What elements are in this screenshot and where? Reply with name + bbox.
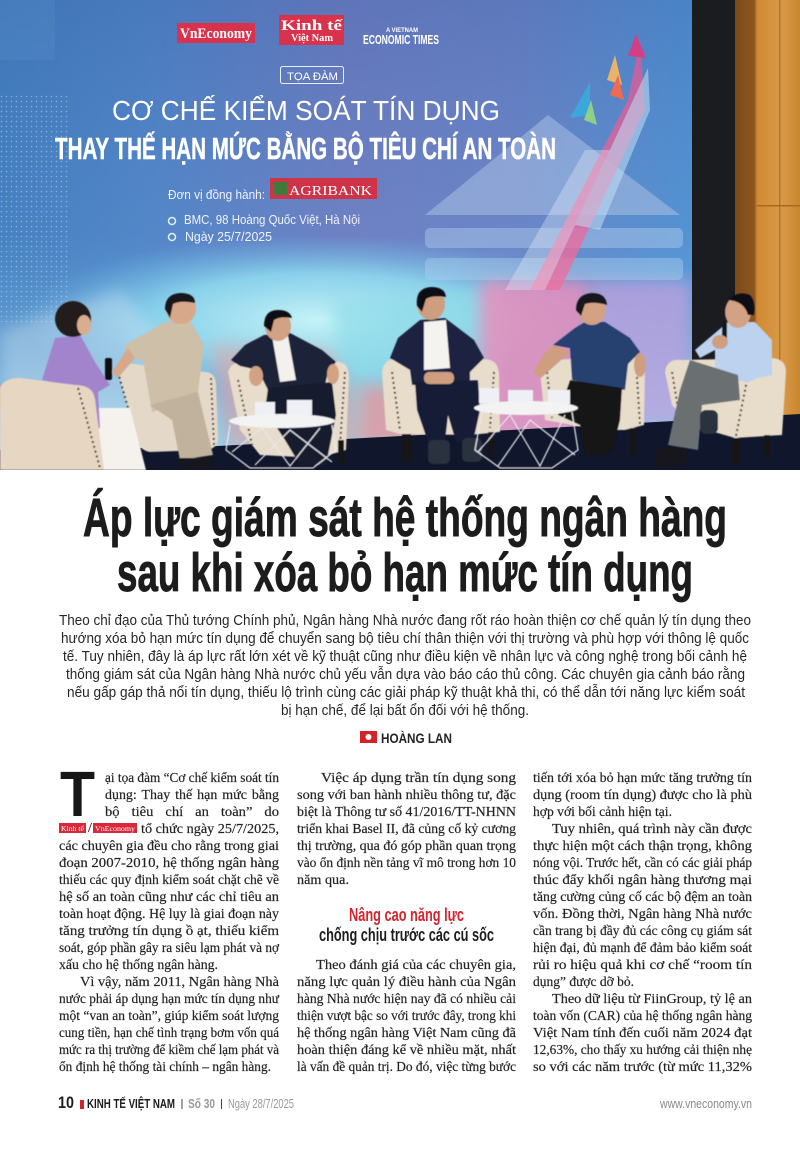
screen title: CƠ CHẾ KIỂM SOÁT TÍN DỤNG bbox=[112, 95, 500, 126]
body column 3: tiến tới xóa bỏ hạn mức tăng trưởng tín bbox=[533, 771, 752, 786]
footer: Ngày 28/7/2025 bbox=[228, 1097, 294, 1111]
body column 2, lower text: hệ thống ngân hàng Việt Nam cũng đã bbox=[297, 1026, 517, 1041]
panelist 5 in blue shirt with chair bbox=[533, 293, 646, 456]
body column 2, upper text: vào ổn định nền tảng vĩ mô trong hơn 10 bbox=[297, 856, 516, 871]
logo: Kinh tế Việt Nam: Việt Nam bbox=[291, 33, 334, 44]
body column 1: bộ tiêu chí an toàn” do bbox=[105, 805, 279, 820]
footer: 10 bbox=[58, 1093, 74, 1112]
logo: Vietnam Economic Times bbox=[364, 28, 439, 44]
intro paragraph: hướng xóa bỏ hạn mức tín dụng để chuyển sang bộ tiêu chí thân thiện với thị trường và phù hợp với thông lệ quốc bbox=[61, 631, 749, 647]
body column 3: dụng” được dỡ bỏ. bbox=[533, 975, 634, 990]
body column 1: soát, góp phần gây ra siêu lạm phát và nợ bbox=[59, 941, 280, 956]
byline bbox=[360, 730, 452, 746]
body column 1: thiếu các quy định kiểm soát chặt chẽ về bbox=[59, 873, 279, 888]
drop cap: T bbox=[60, 758, 95, 830]
screen label: TỌA ĐÀM: TỌA ĐÀM bbox=[287, 70, 338, 83]
panelists and furniture bbox=[0, 287, 786, 470]
footer: Số 30 bbox=[188, 1097, 215, 1111]
intro paragraph: bị hạn chế, để lại bất ổn đối với hệ thống. bbox=[281, 703, 529, 719]
intro paragraph bbox=[59, 613, 751, 719]
body column 1 bbox=[59, 758, 280, 1075]
screen sponsor: Agribank: Đơn vị đồng hành: bbox=[168, 188, 265, 202]
screen venue and date: Ngày 25/7/2025 bbox=[185, 230, 272, 244]
logo: Vietnam Economic Times: A VIETNAM bbox=[386, 28, 418, 34]
body column 3: thực hiện một cách thận trọng, không bbox=[533, 839, 752, 854]
footer: KINH TẾ VIỆT NAM bbox=[87, 1096, 175, 1111]
screen sponsor: Agribank bbox=[168, 178, 377, 202]
logo: VnEconomy: VnEconomy bbox=[180, 26, 252, 42]
intro paragraph: nếu gấp gáp thả nổi tín dụng, thiếu lộ trình cùng các giải pháp kỹ thuật khả thi, có thể dẫn tới năng lực kiểm soát bbox=[67, 684, 745, 701]
body column 3: cần trang bị đầy đủ các công cụ giám sát bbox=[533, 924, 752, 939]
body column 2, upper text bbox=[297, 771, 516, 888]
body column 3: Theo dữ liệu từ FiinGroup, tỷ lệ an bbox=[552, 992, 752, 1007]
wall: dark panel and wood bbox=[692, 0, 800, 415]
inline logos: Kinh tế / VnEconomy: Kinh tế bbox=[61, 825, 85, 833]
body column 3 bbox=[533, 771, 752, 1075]
body column 3: thúc đẩy khối ngân hàng thương mại bbox=[533, 873, 752, 888]
intro paragraph: tế. Tuy nhiên, đây là áp lực rất lớn xét về kỹ thuật cũng như điều kiện về nhân lực và công nghệ trong bối cảnh hệ bbox=[63, 649, 747, 665]
body column 1: ổn định hệ thống tài chính – ngân hàng. bbox=[59, 1060, 271, 1075]
body column 3: toàn vốn (CAR) của hệ thống ngân hàng bbox=[533, 1009, 752, 1024]
body column 1: tăng trưởng tín dụng ồ ạt, thiếu kiểm bbox=[59, 924, 279, 939]
body column 1: hệ số an toàn cũng như các chỉ tiêu an bbox=[59, 890, 279, 905]
body column 2, lower text bbox=[297, 958, 517, 1075]
subheading: chống chịu trước các cú sốc bbox=[319, 925, 494, 945]
subheading bbox=[319, 905, 494, 945]
logo: Kinh tế Việt Nam: Kinh tế bbox=[281, 18, 344, 34]
subheading: Nâng cao năng lực bbox=[349, 905, 464, 925]
body column 2, upper text: biệt là Thông tư số 41/2016/TT-NHNN bbox=[297, 805, 516, 820]
body column 2, upper text: song với ban hành nhiều thông tư, đặc bbox=[297, 788, 516, 803]
screen sponsor: Agribank: AGRIBANK bbox=[289, 184, 372, 199]
body column 1: các chuyên gia đều cho rằng trong giai bbox=[59, 839, 279, 854]
intro paragraph: thống giám sát của Ngân hàng Nhà nước chủ yếu vẫn dựa vào báo cáo thủ công. Các chuyên gia cảnh báo rằng bbox=[66, 666, 745, 683]
body column 3: hiện đại, đủ mạnh để đảm bảo kiểm soát bbox=[533, 941, 752, 956]
body column 3: Tuy nhiên, quá trình này cần được bbox=[552, 822, 752, 837]
footer bbox=[58, 1093, 752, 1112]
table 1 with name cards bbox=[226, 400, 336, 468]
body column 1: toàn hoạt động. Hệ lụy là giai đoạn này bbox=[59, 907, 279, 922]
screen title: THAY THẾ HẠN MỨC BẰNG BỘ TIÊU CHÍ AN TOÀN bbox=[55, 130, 556, 166]
logo: Vietnam Economic Times: ECONOMIC TIMES bbox=[363, 32, 439, 47]
body column 2, upper text: triển khai Basel II, đã củng cố kỷ cương bbox=[297, 822, 516, 837]
body column 3: hợp với bối cảnh hiện tại. bbox=[533, 805, 672, 820]
footer: www.vneconomy.vn bbox=[659, 1097, 752, 1111]
body column 1: xấu cho hệ thống ngân hàng. bbox=[59, 958, 218, 973]
body column 1: Vì vậy, năm 2011, Ngân hàng Nhà bbox=[80, 975, 280, 990]
body column 3: dụng (room tín dụng) được cho là phù bbox=[533, 788, 752, 803]
body column 2, upper text: Việc áp dụng trần tín dụng song bbox=[321, 771, 516, 786]
body column 1: ại tọa đàm “Cơ chế kiểm soát tín bbox=[105, 771, 279, 786]
body column 3: vốn. Đồng thời, Ngân hàng Nhà nước bbox=[533, 907, 752, 922]
body column 2, lower text: hoàn thiện đáng kể về nhiều mặt, nhất bbox=[297, 1043, 516, 1058]
photo: panel discussion on stage bbox=[0, 0, 800, 470]
icon: author mark bbox=[360, 731, 377, 743]
decorative house arrow on screen bbox=[425, 34, 683, 290]
body column 2, lower text: là vấn đề quản trị. Do đó, việc từng bước bbox=[297, 1060, 516, 1075]
body column 3: nóng vội. Trước hết, cần có các giải pháp bbox=[533, 856, 752, 871]
stage screen background bbox=[0, 0, 692, 470]
screen logos bbox=[177, 15, 439, 47]
body column 2, lower text: năng lực quản lý điều hành của Ngân bbox=[297, 975, 516, 990]
headline bbox=[83, 488, 727, 603]
logo: Kinh tế Việt Nam bbox=[279, 15, 344, 45]
body column 1: một “van an toàn”, giúp kiểm soát lượng bbox=[59, 1009, 279, 1024]
inline logos: Kinh tế / VnEconomy: VnEconomy bbox=[95, 825, 136, 833]
body column 3: tăng cường củng cố các bộ đệm an toàn bbox=[533, 890, 752, 905]
screen venue and date: BMC, 98 Hoàng Quốc Việt, Hà Nội bbox=[184, 213, 360, 227]
table 2 with name cards bbox=[474, 388, 578, 468]
panelist 2 in beige shirt with chair bbox=[112, 293, 218, 468]
screen venue and date bbox=[168, 213, 360, 244]
body column 3: rủi ro hiệu quả khi cơ chế “room tín bbox=[533, 958, 752, 973]
body column 2, lower text: hàng Nhà nước hiện nay đã có nhiều cải bbox=[297, 992, 516, 1007]
screen title bbox=[55, 95, 556, 166]
body column 1: cung tiền, hạn chế tình trạng bơm vốn quá bbox=[59, 1026, 280, 1041]
body column 3: so với các năm trước (từ mức 11,32% bbox=[533, 1060, 752, 1075]
body column 1: dụng: Thay thế hạn mức bằng bbox=[105, 788, 279, 803]
stage floor bbox=[0, 414, 800, 470]
panelist 3 in navy suit with chair bbox=[228, 310, 349, 465]
panelist 4 in navy suit with chair bbox=[382, 287, 500, 464]
body column 2, lower text: Theo đánh giá của các chuyên gia, bbox=[316, 958, 516, 973]
panelist 1: woman in purple with chair bbox=[0, 301, 146, 470]
body column 1: mức ra thị trường để kiềm chế lạm phát và bbox=[59, 1043, 280, 1058]
panelist 6 in light blue shirt with chair bbox=[655, 293, 786, 466]
body column 1: nước phải áp dụng hạn mức tín dụng như bbox=[59, 992, 279, 1007]
intro paragraph: Theo chỉ đạo của Thủ tướng Chính phủ, Ngân hàng Nhà nước đang rốt ráo hoàn thiện cơ chế quản lý tín dụng theo bbox=[59, 613, 751, 629]
body column 2, lower text: thiện vượt bậc so với trước đây, trong khi bbox=[297, 1009, 516, 1024]
body column 3: Việt Nam tính đến cuối năm 2024 đạt bbox=[533, 1026, 752, 1041]
byline: HOÀNG LAN bbox=[381, 730, 452, 746]
body column 3: 12,63%, cho thấy xu hướng cải thiện nhẹ bbox=[533, 1043, 752, 1058]
body column 1: tổ chức ngày 25/7/2025, bbox=[141, 822, 279, 837]
screen label: TỌA ĐÀM bbox=[280, 66, 344, 84]
inline logos: Kinh tế / VnEconomy bbox=[59, 821, 137, 836]
inline logos: Kinh tế / VnEconomy: / bbox=[88, 821, 92, 836]
body column 2, upper text: thị trường, qua đó góp phần quan trọng bbox=[297, 839, 516, 854]
body column 1: đoạn 2007-2010, hệ thống ngân hàng bbox=[59, 856, 279, 871]
body column 2, upper text: năm qua. bbox=[297, 873, 349, 888]
